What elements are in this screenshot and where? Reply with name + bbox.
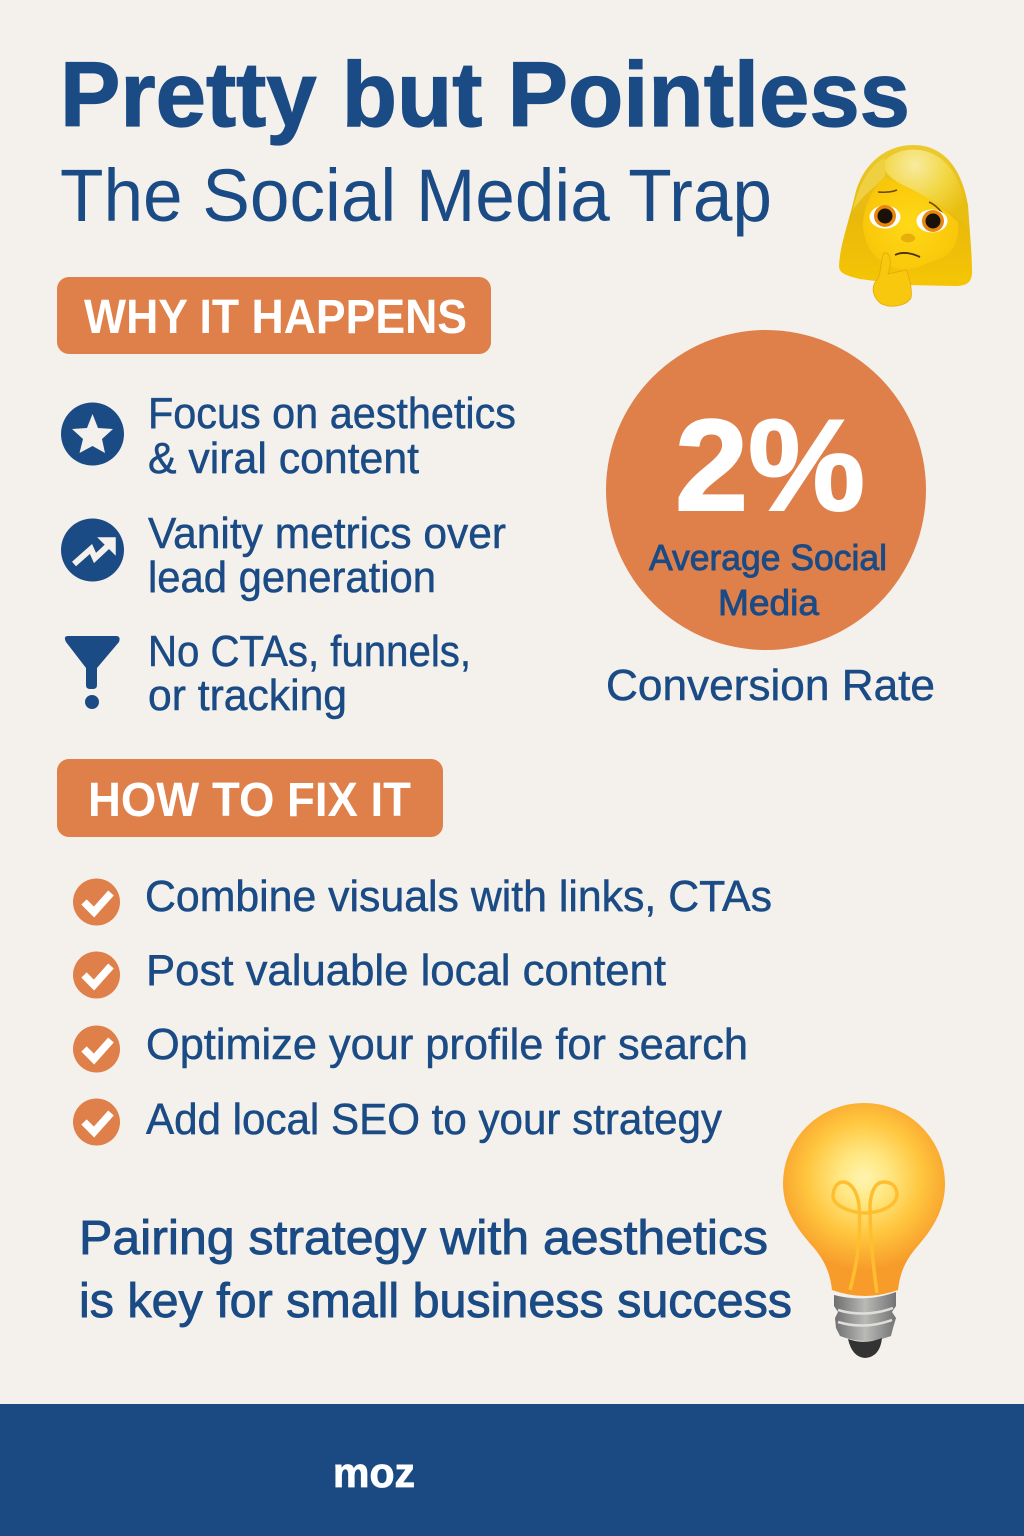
checklist item 4: Add local SEO to your strategy xyxy=(146,1095,722,1144)
text: vanity metrics xyxy=(148,509,506,602)
heading: how to fix it: HOW TO FIX IT xyxy=(88,774,411,827)
text: focus on aesthetics: & viral content xyxy=(148,434,419,483)
panel: how to fix it xyxy=(57,759,772,1146)
text: vanity metrics: lead generation xyxy=(148,553,436,602)
panel: why it happens xyxy=(57,277,516,720)
subtitle: The Social Media Trap xyxy=(60,154,772,237)
text: focus on aesthetics: Focus on aesthetics xyxy=(148,389,516,438)
stat label: Average Social xyxy=(649,537,887,578)
checklist item 2: Post valuable local content xyxy=(146,946,666,995)
title: Pretty but Pointless xyxy=(60,44,910,146)
stat caption: Conversion Rate xyxy=(606,661,935,710)
heading: how to fix it xyxy=(57,759,443,837)
text: no CTAs xyxy=(148,627,471,720)
stat circle xyxy=(606,330,926,650)
icon: star badge xyxy=(61,402,124,466)
checklist item 1: Combine visuals with links, CTAs xyxy=(145,872,772,921)
icon: growth arrow badge xyxy=(61,518,124,582)
footer band xyxy=(0,1404,1024,1536)
text: no CTAs: No CTAs, funnels, xyxy=(148,627,471,676)
stat value: 2% xyxy=(675,392,865,538)
logo: moz: moz xyxy=(333,1449,415,1496)
stat label: Media xyxy=(718,582,820,623)
closing statement: Pairing strategy with aesthetics xyxy=(79,1212,768,1265)
heading: why it happens: WHY IT HAPPENS xyxy=(84,291,467,344)
stat label xyxy=(649,537,887,623)
closing statement: is key for small business success xyxy=(79,1275,792,1328)
icon: thinking woman emoji xyxy=(839,145,972,306)
heading: why it happens xyxy=(57,277,491,354)
text: focus on aesthetics xyxy=(148,389,516,483)
text: no CTAs: or tracking xyxy=(148,671,347,720)
stat: 2% conversion rate xyxy=(606,330,935,710)
icon: funnel xyxy=(65,636,120,709)
checklist item 3: Optimize your profile for search xyxy=(146,1020,748,1069)
text: vanity metrics: Vanity metrics over xyxy=(148,509,506,558)
icon: light bulb xyxy=(783,1103,945,1358)
closing statement xyxy=(79,1212,792,1328)
